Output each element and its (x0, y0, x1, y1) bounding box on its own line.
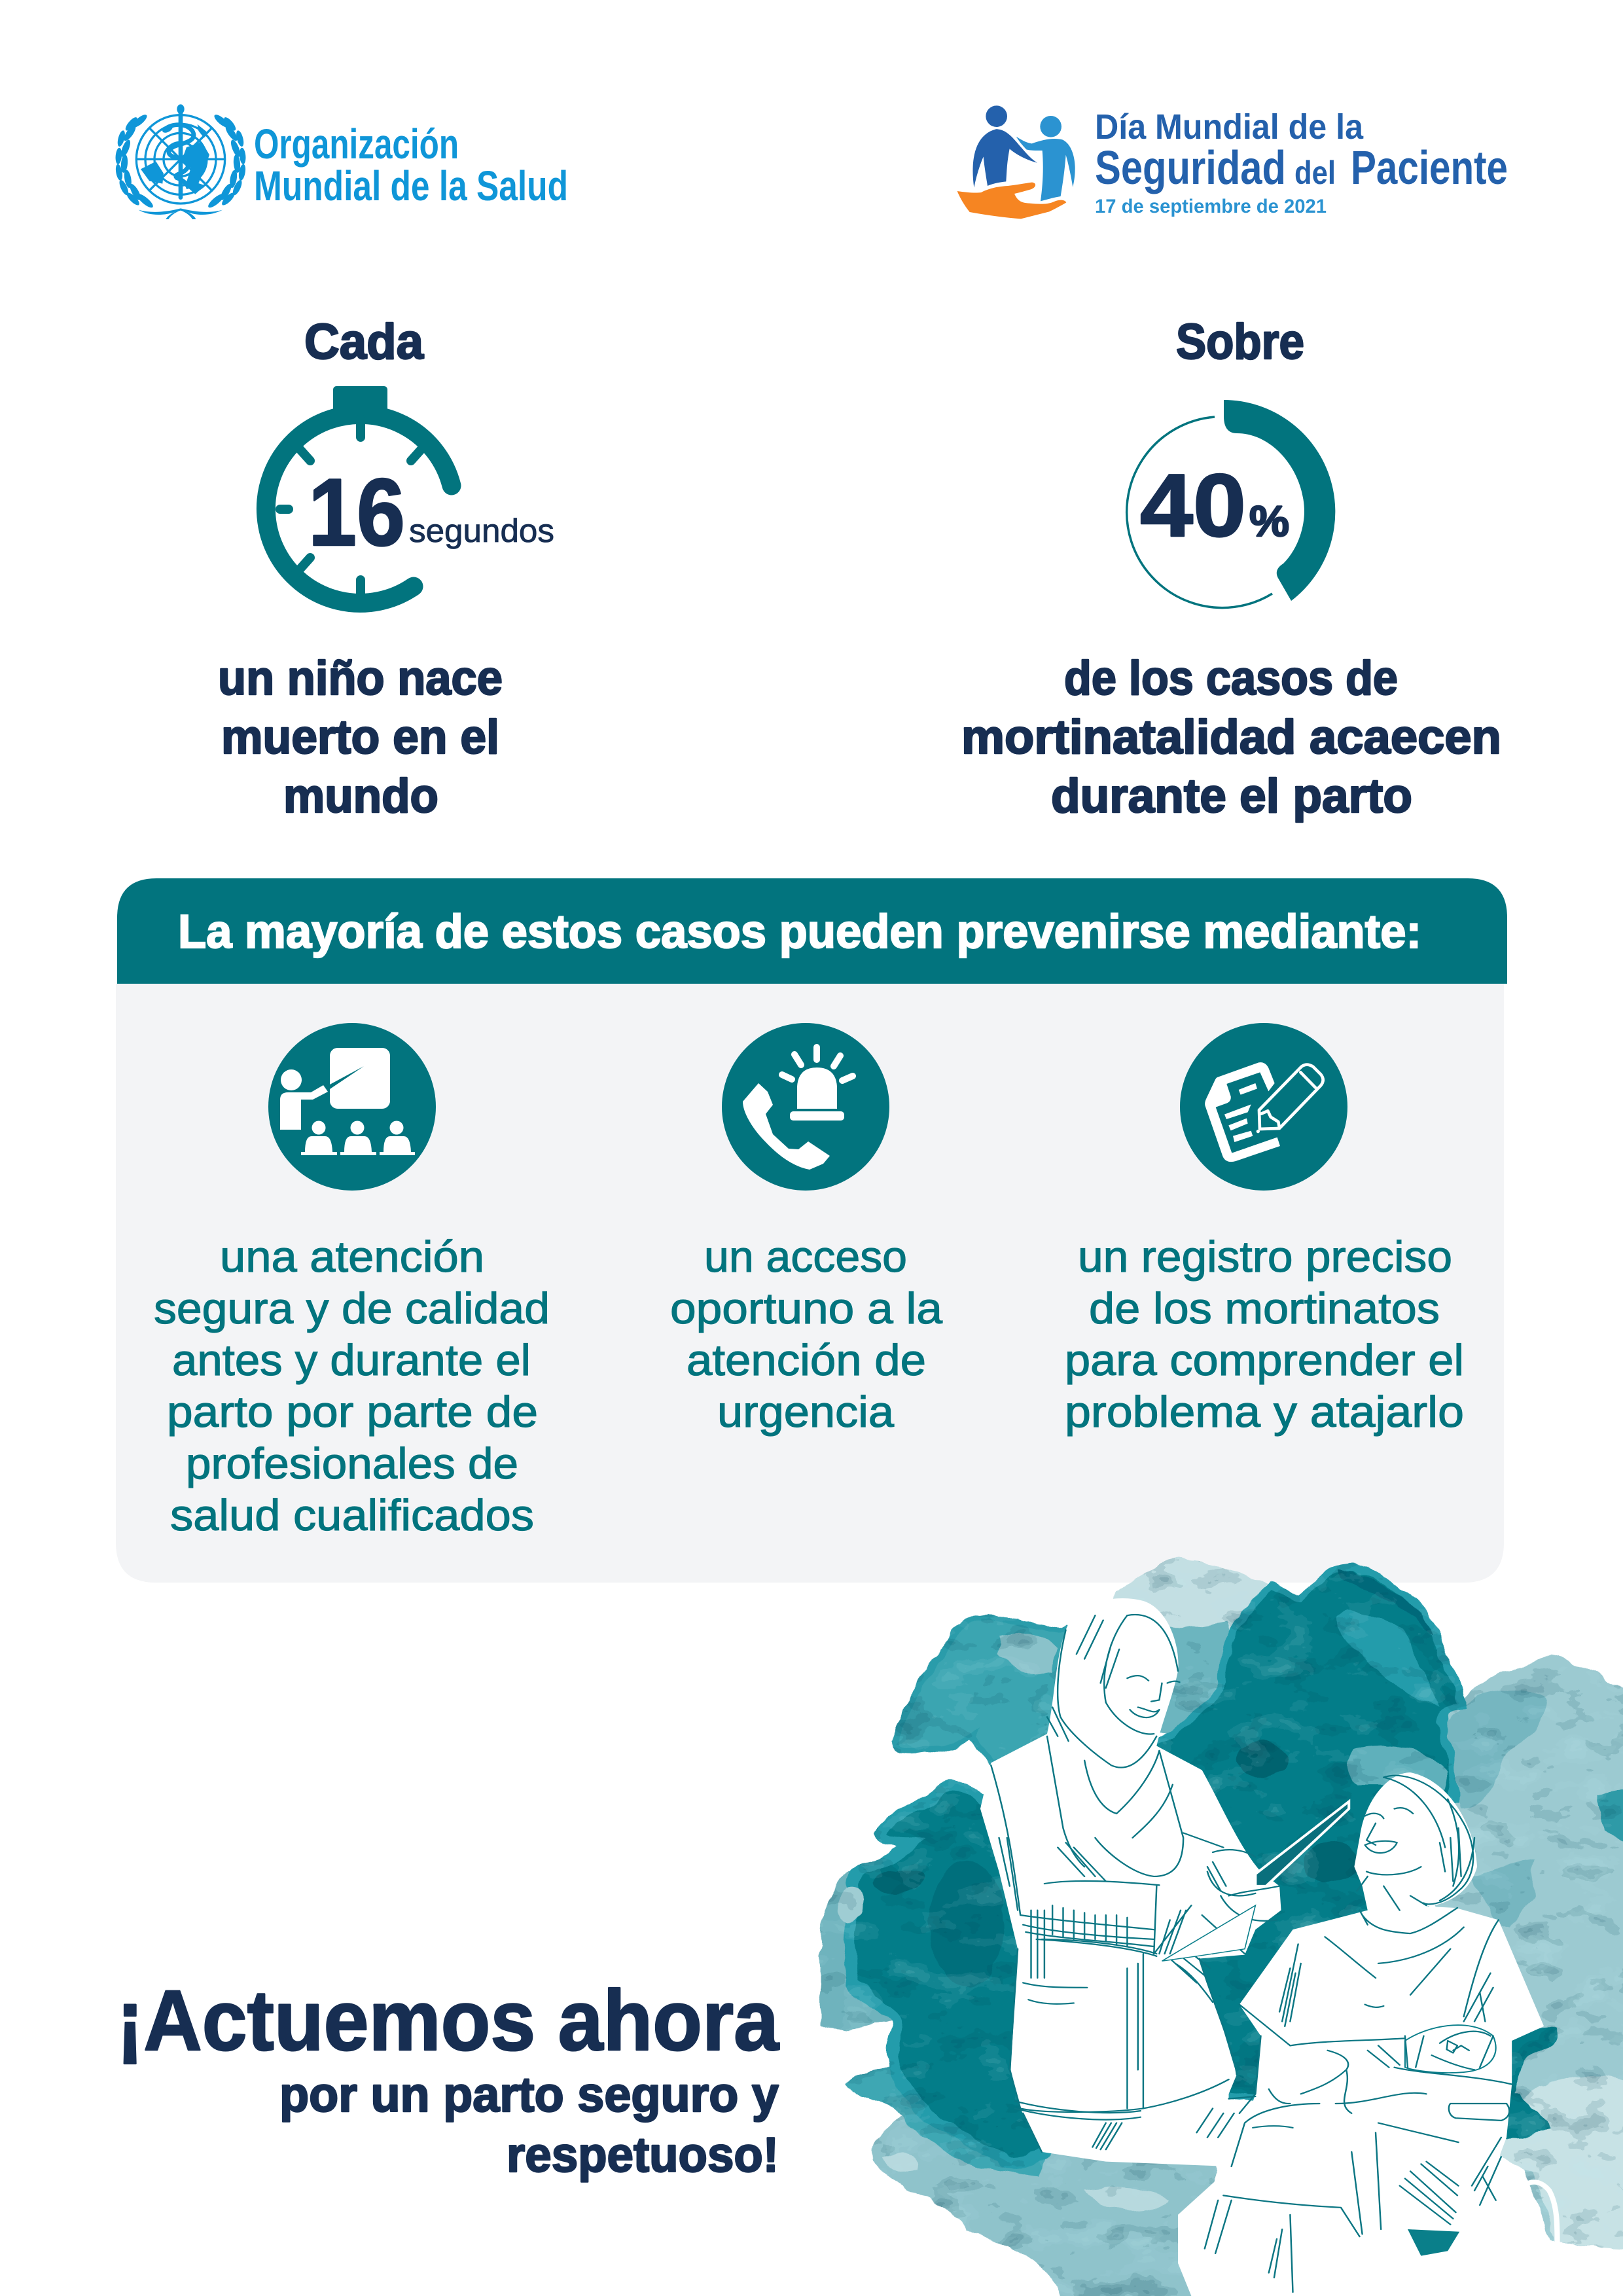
caption: un niño nace muerto en el mundo: un niño nace (218, 652, 503, 705)
caption: de los casos de mortinatalidad: durante el parto (1051, 770, 1412, 823)
icon: record and pencil (1180, 1023, 1347, 1191)
text: atención segura y de calidad: segura y de calidad (154, 1284, 550, 1333)
text: registro preciso: problema y atajarlo (1065, 1388, 1464, 1437)
baby (1405, 2025, 1496, 2073)
mother line work (1197, 1776, 1512, 2292)
figure: mother with newborn in wheelchair (1178, 1772, 1558, 2296)
panel heading: La mayoría de estos casos pueden prevenirse mediante: (178, 906, 1421, 958)
campaign title: del (1294, 154, 1336, 191)
clipboard (1255, 1801, 1349, 1886)
text: acceso oportuno a urgencia (670, 1232, 943, 1437)
percent sign: % (1249, 497, 1289, 545)
campaign title: Seguridad (1095, 142, 1286, 194)
watercolor background (820, 1560, 1623, 2296)
donut chart: 40% (1127, 400, 1335, 608)
panel: prevention (116, 878, 1507, 1583)
caption: de los casos de mortinatalidad (961, 652, 1501, 823)
text: registro preciso: un registro preciso (1078, 1232, 1452, 1282)
text: atención segura y de calidad: una atención (220, 1232, 484, 1282)
text: atención segura y de calidad: antes y durante el (172, 1336, 531, 1385)
call to action (116, 1972, 779, 2182)
caption: un niño nace muerto en el mundo: muerto en el (221, 711, 499, 764)
heading: Cada: Cada (304, 314, 424, 370)
caption: un niño nace muerto en el mundo: mundo (283, 770, 438, 823)
subhead: por un parto seguro y respetuoso: por un parto seguro y (279, 2067, 779, 2122)
text: atención segura y de calidad (154, 1232, 550, 1540)
text: acceso oportuno a urgencia: oportuno a la (670, 1284, 943, 1333)
text: acceso oportuno a urgencia: urgencia (717, 1388, 895, 1437)
caption: de los casos de mortinatalidad: mortinatalidad acaecen (961, 711, 1501, 764)
panel background (116, 984, 1504, 1583)
figure: nurse (980, 1598, 1349, 2166)
campaign title: Día Mundial de la (1095, 107, 1364, 147)
subhead: por un parto seguro y respetuoso: respetuoso! (507, 2127, 779, 2182)
campaign title: Paciente (1351, 142, 1508, 194)
heading: Sobre: Sobre (1176, 314, 1304, 370)
icon: WHO emblem (115, 104, 247, 219)
unit: segundos: segundos (409, 512, 554, 549)
text: atención segura y de calidad: parto por parte de (167, 1388, 538, 1437)
text: acceso oportuno a urgencia: un acceso (704, 1232, 907, 1282)
nurse line work (991, 1615, 1279, 2152)
campaign title (1095, 107, 1508, 217)
organization name (254, 120, 568, 209)
text: registro preciso: de los mortinatos (1089, 1284, 1440, 1333)
text: acceso oportuno a urgencia: atención de (687, 1336, 926, 1385)
logo: Día Mundial de la Seguridad del Paciente (957, 105, 1508, 219)
icon: two people and a hand (957, 105, 1075, 219)
icon: emergency phone and siren (722, 1023, 889, 1191)
logo: Organización Mundial de la Salud (115, 104, 568, 219)
panel header bar (117, 878, 1507, 984)
caption: un niño nace muerto en el mundo (218, 652, 503, 823)
text: registro preciso (1065, 1232, 1464, 1437)
subhead: por un parto seguro y respetuoso (279, 2067, 779, 2182)
number 40: 40 (1140, 456, 1246, 555)
campaign title: 17 de septiembre de 2021 (1095, 196, 1327, 217)
text: atención segura y de calidad: profesionales de (186, 1439, 518, 1488)
icon: stopwatch (266, 386, 452, 603)
stat: 16 seconds (218, 314, 554, 823)
text: atención segura y de calidad: salud cualificados (170, 1491, 534, 1540)
wheelchair wheel (1504, 2182, 1558, 2244)
stat: 40 percent (961, 314, 1501, 823)
organization name: Organización (254, 120, 459, 168)
icon: training class (268, 1023, 436, 1191)
illustration: nurse and mother with newborn on watercolor (820, 1560, 1623, 2296)
text: registro preciso: para comprender el (1065, 1336, 1464, 1385)
headline: Actuemos ahora: ¡Actuemos ahora (116, 1972, 779, 2068)
caption: de los casos de mortinatalidad: de los casos de (1064, 652, 1398, 705)
number 16: 16 (308, 459, 405, 565)
organization name: Mundial de la Salud (254, 162, 568, 209)
